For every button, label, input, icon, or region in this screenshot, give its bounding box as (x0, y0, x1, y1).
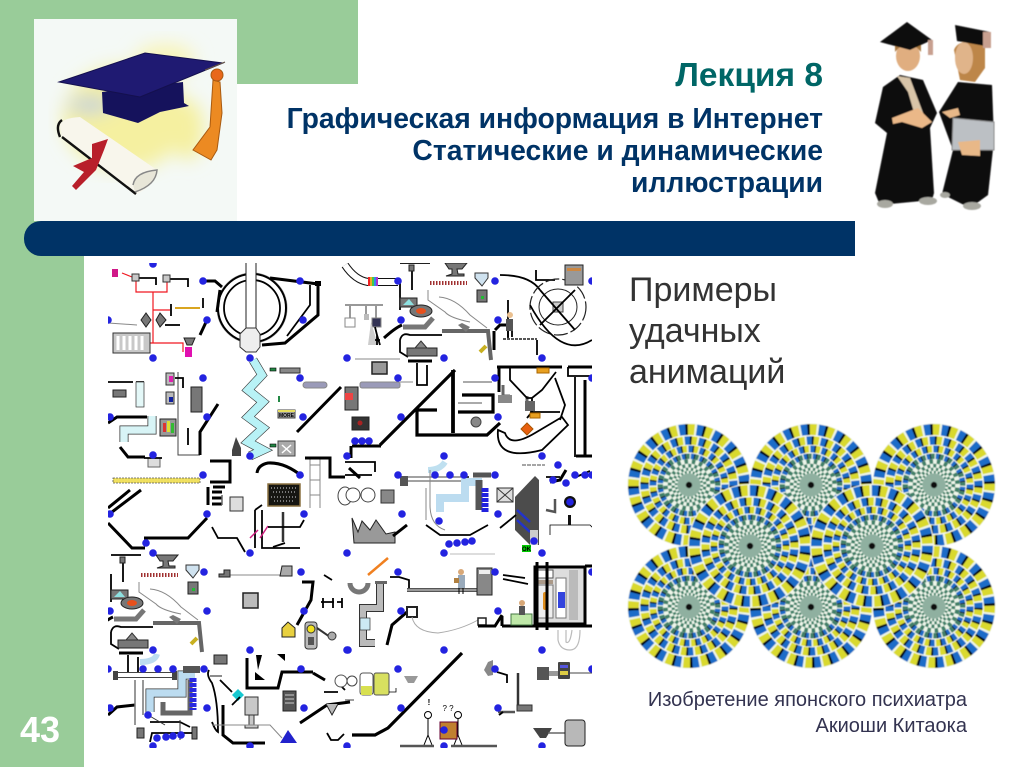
subtitle: Статические и динамические (412, 134, 823, 166)
machine quadrant: top-right: OK (522, 547, 532, 553)
subtitle (287, 102, 823, 198)
tassel (193, 80, 222, 160)
navy header bar (24, 221, 855, 256)
machine quadrant: top-left: MORE (279, 413, 295, 419)
mid band (345, 462, 375, 475)
green top block (84, 0, 358, 84)
examples heading: Примеры (629, 271, 777, 309)
illusion caption: Акиоши Китаока (816, 715, 967, 737)
machine quadrant: bottom-right: ! (428, 698, 430, 707)
ribbon (72, 139, 108, 190)
disc: top right (864, 415, 1004, 555)
blue connection dots (104, 260, 596, 750)
machine quadrant: top-left (108, 262, 352, 512)
cap skull (102, 82, 189, 123)
disc: middle left (688, 484, 812, 608)
subtitle: Графическая информация в Интернет (287, 102, 823, 134)
examples heading: анимаций (629, 353, 785, 391)
animated machinery illustration (108, 263, 592, 748)
girl figure (939, 25, 994, 210)
machine quadrant: bottom-right: ? ? (442, 704, 454, 713)
examples heading (629, 271, 785, 391)
machine quadrant: bottom-right (345, 558, 592, 746)
boy figure (875, 22, 937, 208)
disc: middle right (810, 484, 934, 608)
ducts (497, 367, 592, 392)
examples heading: удачных (629, 312, 761, 350)
slide number: 43 (20, 709, 60, 750)
illusion caption: Изобретение японского психиатра (648, 689, 967, 711)
green frame (0, 0, 84, 767)
disc: bottom left (619, 537, 759, 677)
icon: graduation cap and diploma (34, 19, 237, 221)
disc: bottom centre (741, 537, 881, 677)
cap board (59, 53, 223, 97)
machine quadrant: top-right (345, 263, 595, 554)
lecture title: Лекция 8 (675, 57, 823, 94)
subtitle: иллюстрации (631, 166, 823, 198)
illusion caption (648, 689, 967, 737)
machine quadrant: bottom-left (95, 505, 350, 743)
disc: top centre (741, 415, 881, 555)
disc: top left (619, 415, 759, 555)
diploma scroll (60, 117, 157, 195)
disc: bottom right (864, 537, 1004, 677)
